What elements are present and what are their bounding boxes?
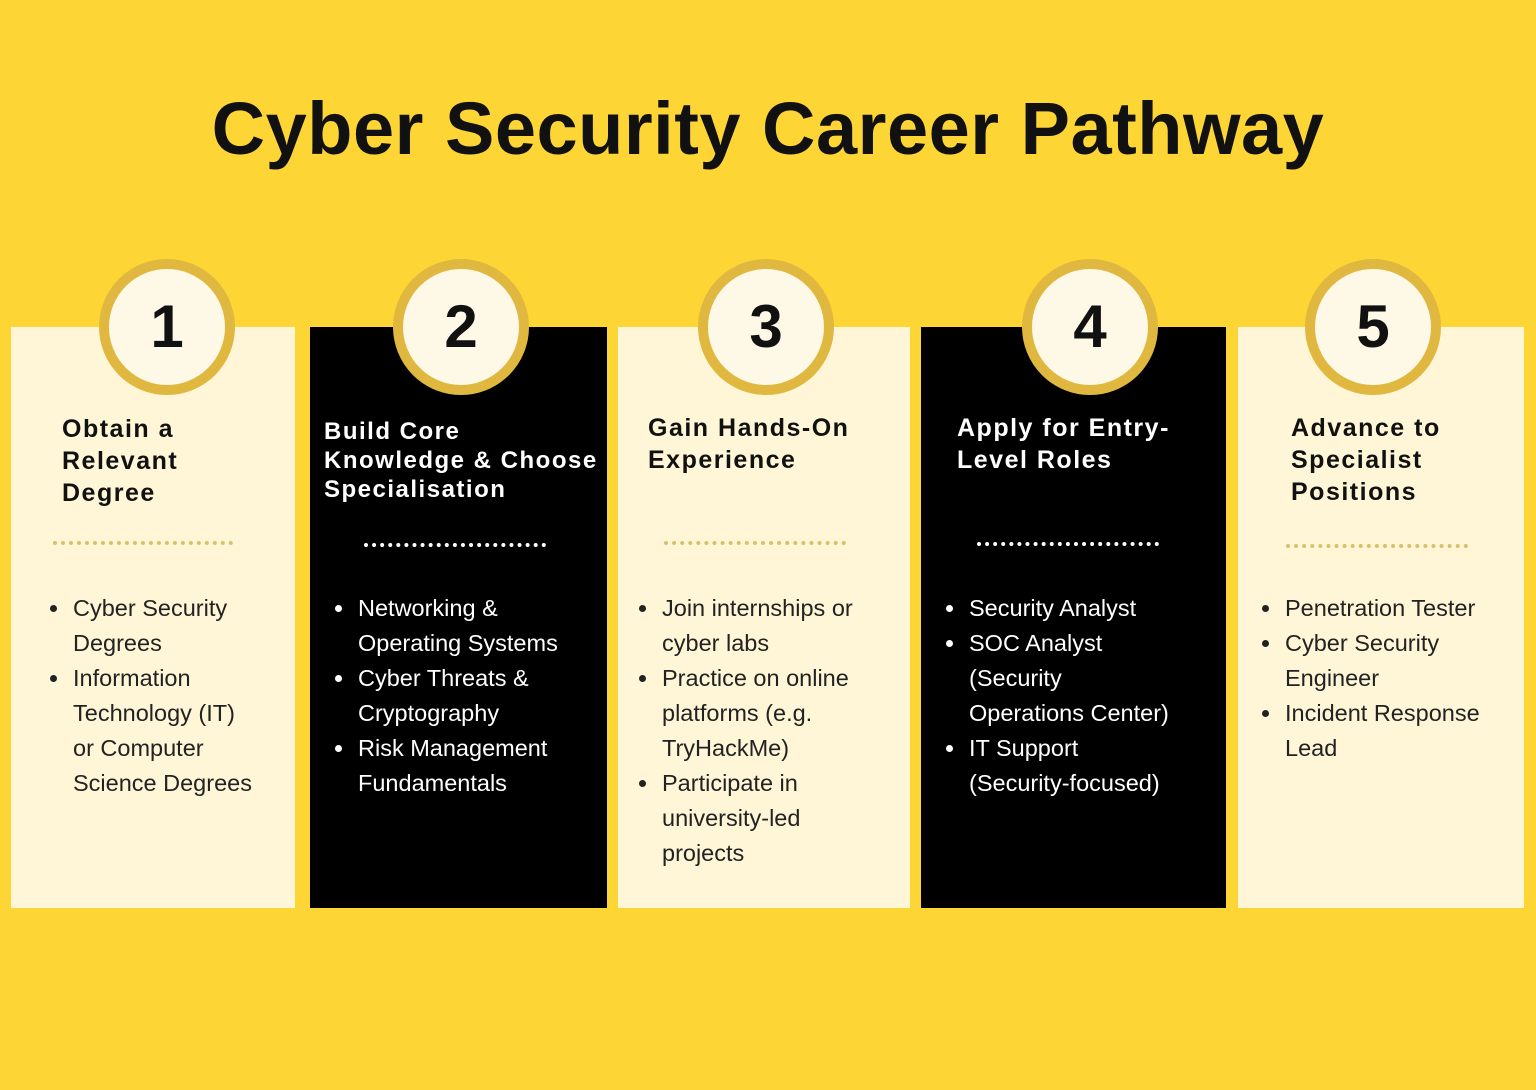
bullets 5: Incident Response bbox=[1285, 700, 1480, 726]
heading 1: Obtain a bbox=[62, 415, 174, 443]
bullets 3: projects bbox=[662, 840, 744, 866]
bullets 4: (Security bbox=[969, 665, 1062, 691]
heading 1 bbox=[62, 415, 178, 507]
bullets 4: Operations Center) bbox=[969, 700, 1169, 726]
heading 4: Level Roles bbox=[957, 446, 1112, 474]
bullets 3: TryHackMe) bbox=[662, 735, 789, 761]
circle 2 bbox=[393, 259, 529, 395]
heading 2: Knowledge & Choose bbox=[324, 447, 598, 474]
bullets 2: Cyber Threats & bbox=[358, 665, 529, 691]
bullets 3 bbox=[639, 595, 853, 866]
heading 5: Advance to bbox=[1291, 414, 1441, 442]
heading 3 bbox=[648, 414, 849, 474]
panel: step 4 bbox=[921, 327, 1226, 908]
bullets 1 bbox=[50, 595, 252, 796]
bullets 3: university-led bbox=[662, 805, 800, 831]
bullets 3: platforms (e.g. bbox=[662, 700, 812, 726]
circle 3: 3 bbox=[749, 293, 783, 360]
heading 2 bbox=[324, 418, 598, 503]
bullets 2 bbox=[335, 595, 558, 796]
panel: step 1 bbox=[11, 327, 295, 908]
heading 2: Specialisation bbox=[324, 476, 506, 503]
bullets 2: Cryptography bbox=[358, 700, 499, 726]
bullets 1: or Computer bbox=[73, 735, 204, 761]
panel: step 5 bbox=[1238, 327, 1524, 908]
bullets 5 bbox=[1262, 595, 1480, 761]
bullets 4: IT Support bbox=[969, 735, 1078, 761]
circle 3 bbox=[698, 259, 834, 395]
heading 5: Positions bbox=[1291, 478, 1417, 506]
bullets 2: Networking & bbox=[358, 595, 498, 621]
heading 1: Relevant bbox=[62, 447, 178, 475]
heading 4 bbox=[957, 414, 1170, 474]
bullets 5: Cyber Security bbox=[1285, 630, 1439, 656]
bullets 1: Technology (IT) bbox=[73, 700, 235, 726]
bullets 4: SOC Analyst bbox=[969, 630, 1102, 656]
bullets 1: Science Degrees bbox=[73, 770, 252, 796]
circle 1 bbox=[99, 259, 235, 395]
bullets 4: Security Analyst bbox=[969, 595, 1136, 621]
bullets 1: Cyber Security bbox=[73, 595, 227, 621]
bullets 2: Fundamentals bbox=[358, 770, 507, 796]
circle 1: 1 bbox=[150, 293, 184, 360]
bullets 3: Practice on online bbox=[662, 665, 849, 691]
bullets 3: Participate in bbox=[662, 770, 798, 796]
title: Cyber Security Career Pathway bbox=[212, 87, 1324, 170]
bullets 5: Lead bbox=[1285, 735, 1337, 761]
bullets 3: Join internships or bbox=[662, 595, 853, 621]
bullets 3: cyber labs bbox=[662, 630, 769, 656]
panel: step 2 bbox=[310, 327, 607, 908]
heading 2: Build Core bbox=[324, 418, 460, 445]
circle 2: 2 bbox=[444, 293, 478, 360]
circle 4: 4 bbox=[1073, 293, 1107, 360]
heading 3: Experience bbox=[648, 446, 796, 474]
bullets 5: Penetration Tester bbox=[1285, 595, 1475, 621]
heading 4: Apply for Entry- bbox=[957, 414, 1170, 442]
panel: step 3 bbox=[618, 327, 910, 908]
bullets 5: Engineer bbox=[1285, 665, 1379, 691]
heading 5 bbox=[1291, 414, 1441, 506]
circle 4 bbox=[1022, 259, 1158, 395]
bullets 4 bbox=[946, 595, 1169, 796]
bullets 1: Information bbox=[73, 665, 191, 691]
bullets 4: (Security-focused) bbox=[969, 770, 1160, 796]
heading 3: Gain Hands-On bbox=[648, 414, 849, 442]
bullets 2: Operating Systems bbox=[358, 630, 558, 656]
circle 5: 5 bbox=[1356, 293, 1390, 360]
bullets 2: Risk Management bbox=[358, 735, 547, 761]
circle 5 bbox=[1305, 259, 1441, 395]
bullets 1: Degrees bbox=[73, 630, 162, 656]
heading 1: Degree bbox=[62, 479, 156, 507]
heading 5: Specialist bbox=[1291, 446, 1423, 474]
